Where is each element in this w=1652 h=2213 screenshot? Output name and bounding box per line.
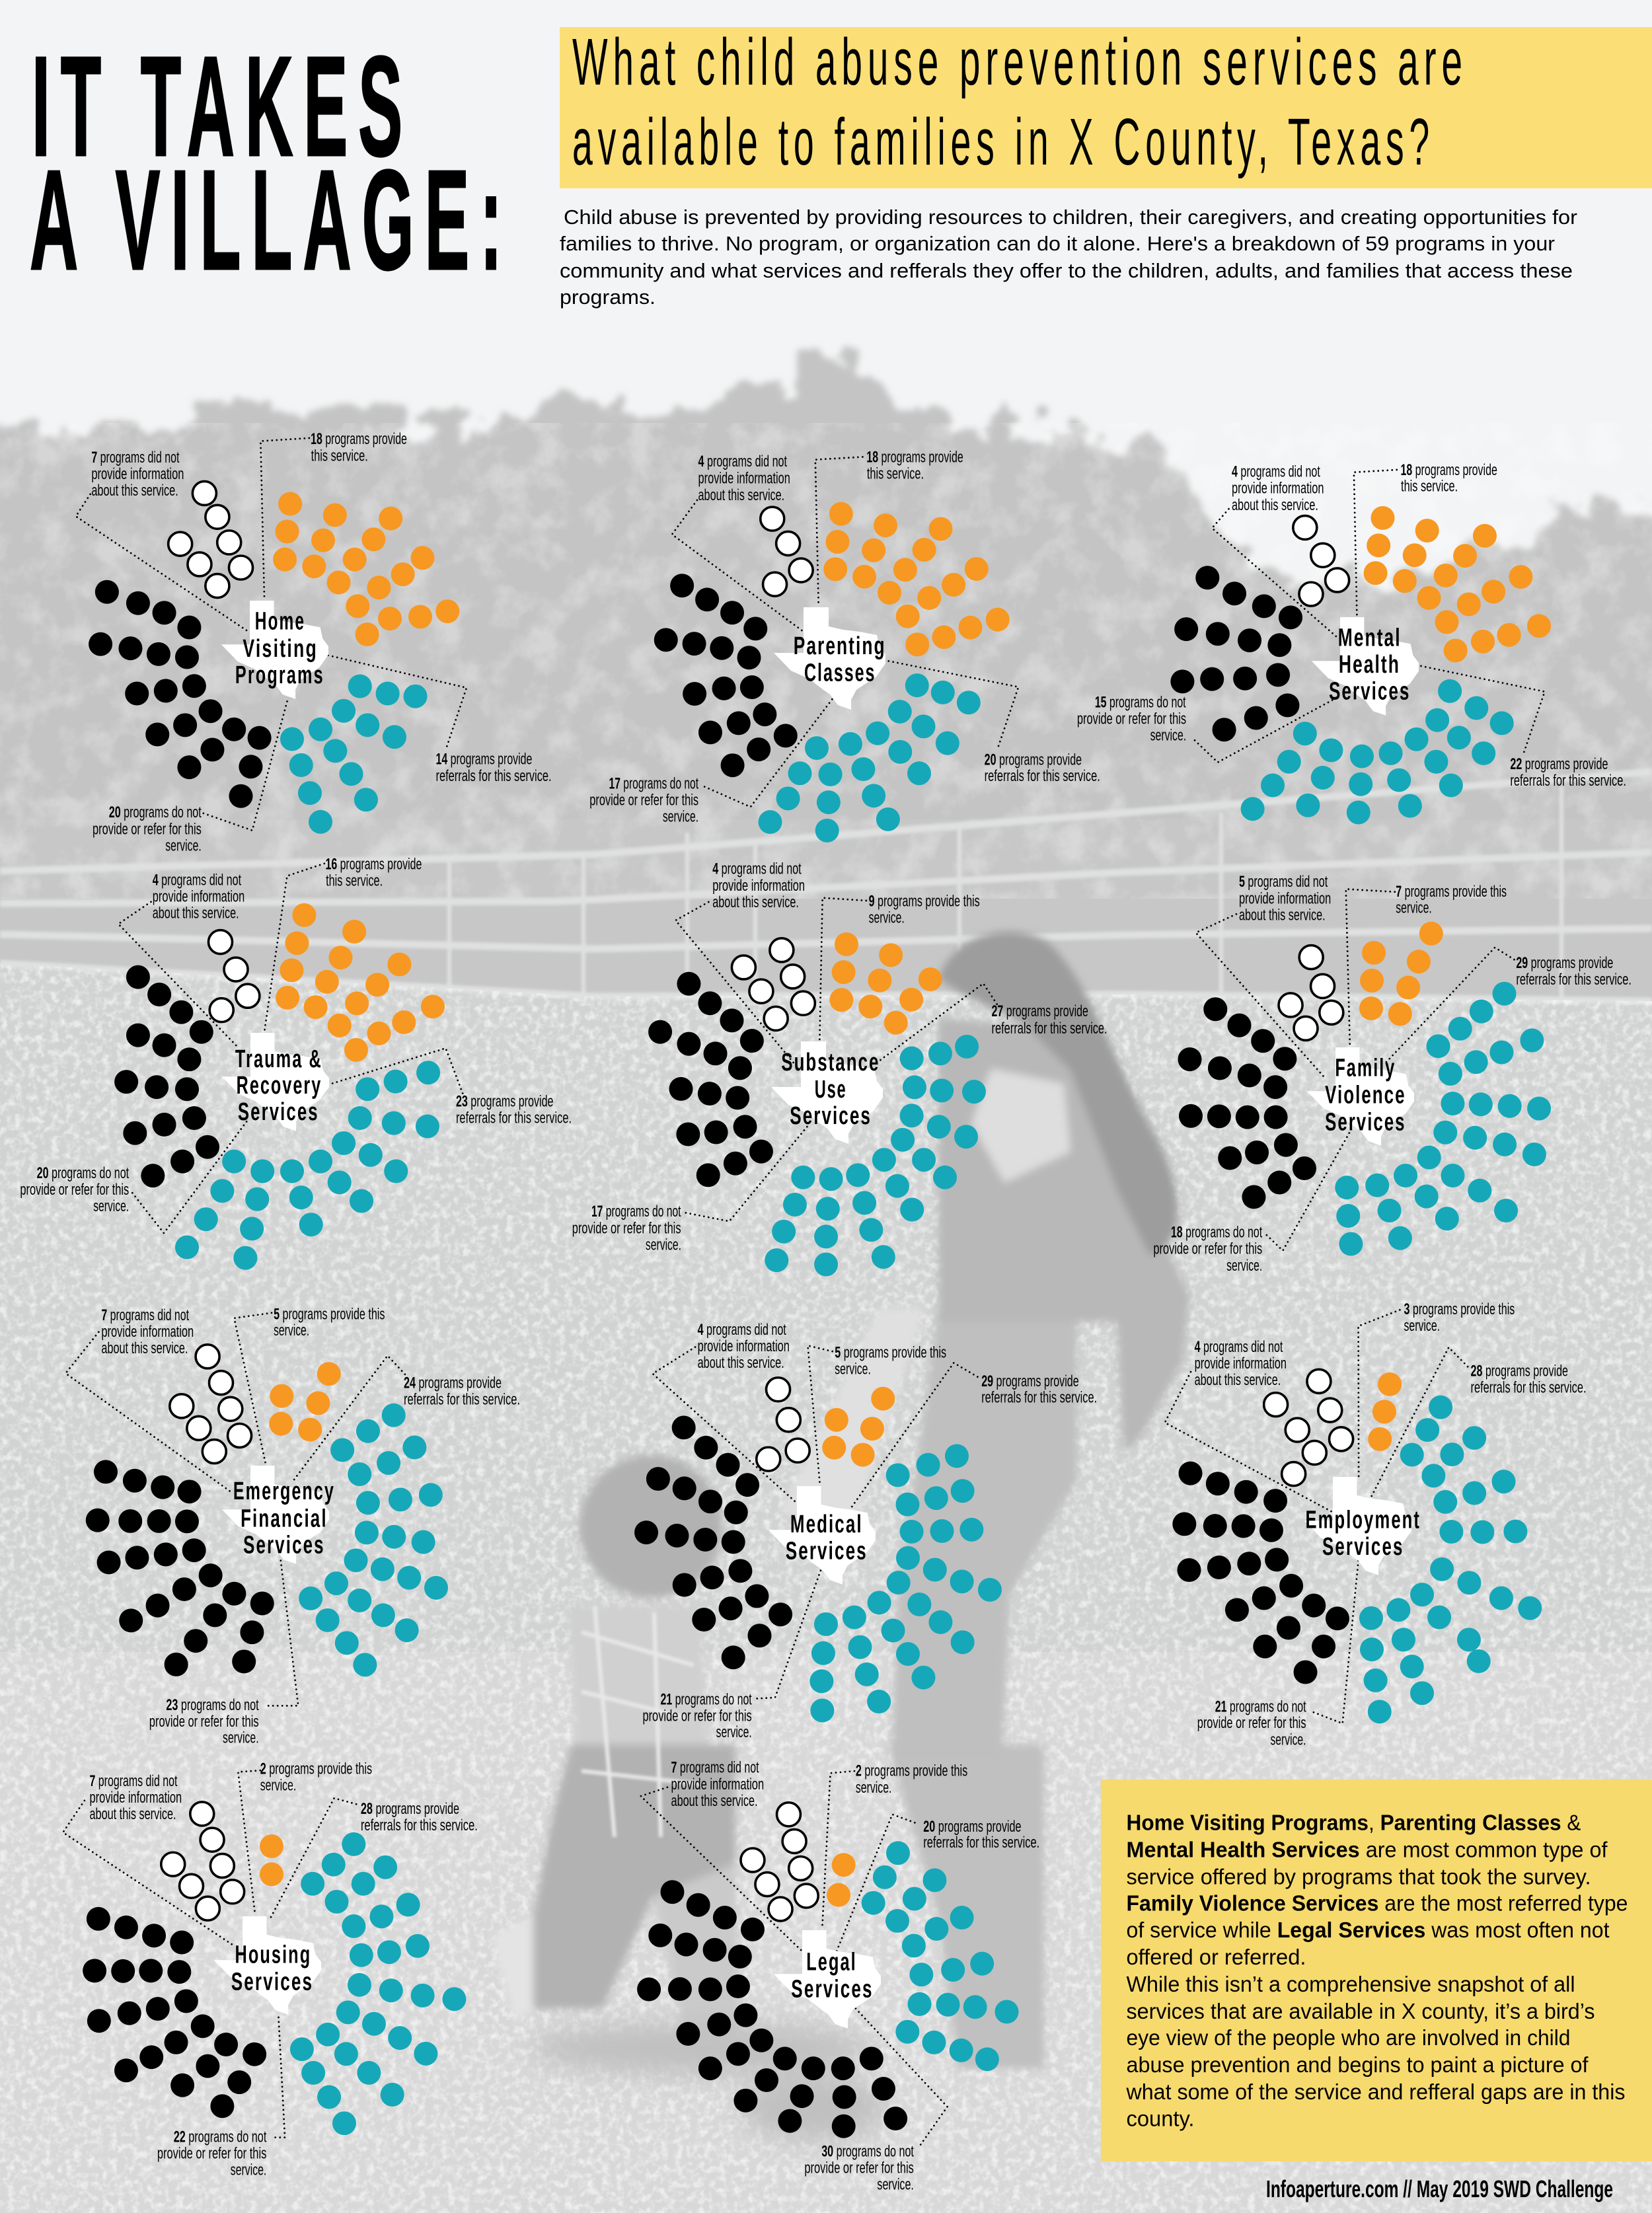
black dots: do not provide or refer: [634, 1415, 792, 1669]
teal dots: provide referrals: [175, 1061, 440, 1270]
callout: key takeaways: Mental Health Services are most common type of: [1126, 1837, 1608, 1862]
label: referrals: referrals for this service.: [436, 767, 552, 784]
label: referrals: referrals for this service.: [981, 1388, 1097, 1406]
service name: [1329, 623, 1410, 705]
label: no information: about this service.: [91, 481, 178, 499]
callout: key takeaways: what some of the service and refferal gaps are in this: [1126, 2080, 1626, 2104]
service name: Mental: [1338, 623, 1402, 652]
service name: Use: [815, 1075, 847, 1104]
service name: Employment: [1306, 1505, 1421, 1534]
teal dots: provide referrals: [765, 1035, 986, 1276]
service name: Visiting: [243, 634, 318, 663]
service name: Substance: [781, 1048, 880, 1076]
label: do not: provide or refer for this: [1153, 1240, 1262, 1257]
callout: key takeaways: services that are available in X county, it’s a bird’s: [1126, 1999, 1595, 2023]
teal dots: provide referrals: [280, 675, 428, 834]
service name: Violence: [1325, 1080, 1406, 1109]
panel: Legal Services: 30 programs do not: [821, 2142, 914, 2160]
label: do not: 23 programs do not: [166, 1697, 259, 1714]
black dots: do not provide or refer: [83, 1907, 266, 2118]
intro text block: programs.: [560, 285, 656, 309]
panel: Housing Services: 7 programs did not: [89, 1772, 177, 1789]
orange dots: provide service: [823, 502, 1010, 656]
label: do not: 20 programs do not: [109, 803, 202, 821]
label: provide: service.: [274, 1322, 309, 1339]
panel: Mental Health Services: provide information: [1232, 480, 1324, 497]
panel: Legal Services: Legal: [806, 1948, 857, 1976]
label: referrals: [361, 1799, 478, 1834]
panel: Home Visiting Programs: [76, 430, 552, 854]
panel: Housing Services: Services: [231, 1968, 313, 1996]
panel: Parenting Classes: [589, 448, 1100, 843]
service name: Emergency: [233, 1476, 335, 1505]
label: referrals: referrals for this service.: [456, 1109, 572, 1127]
label: provide: [1396, 882, 1507, 917]
label: provide: [856, 1762, 967, 1796]
text: referrals for this service.: [923, 1834, 1039, 1852]
white dots: no information: [161, 1802, 244, 1920]
panel: Family Violence Services: [1153, 872, 1632, 1274]
label: no information: 5 programs did not: [1239, 872, 1328, 890]
label: do not: provide or refer for this: [149, 1713, 259, 1731]
intro text block: [560, 206, 1577, 309]
label: do not: 21 programs do not: [1215, 1698, 1306, 1715]
label: referrals: [436, 749, 552, 784]
label: no information: about this service.: [1239, 906, 1326, 924]
orange dots: provide service: [829, 932, 942, 1035]
label: do not: provide or refer for this: [589, 791, 698, 809]
teal dots: provide referrals: [862, 1841, 1018, 2071]
label: provide: [311, 430, 407, 465]
label: no information: 7 programs did not: [101, 1306, 189, 1324]
label: provide: service.: [835, 1359, 871, 1378]
label: do not: [149, 1697, 259, 1746]
teal dots: provide referrals: [299, 1404, 448, 1676]
panel: Substance Use Services: [572, 860, 1108, 1276]
label: provide: this service.: [1401, 478, 1458, 495]
label: do not: [1197, 1698, 1306, 1748]
label: do not: service.: [93, 1197, 129, 1215]
panel: Legal Services: Services: [791, 1975, 874, 2003]
panel: Mental Health Services: provide or refer for this: [1077, 710, 1186, 728]
label: provide: service.: [260, 1776, 296, 1794]
label: provide: 18 programs provide: [311, 430, 407, 447]
label: do not: service.: [223, 1729, 259, 1746]
black dots: do not provide or refer: [654, 574, 798, 777]
service name: [794, 632, 886, 687]
label: no information: about this service.: [698, 1353, 784, 1371]
orange dots: provide service: [1368, 1372, 1402, 1451]
service name: Services: [1325, 1107, 1406, 1135]
label: do not: provide or refer for this: [93, 820, 202, 838]
label: do not: [804, 2142, 914, 2193]
label: do not: [20, 1164, 129, 1215]
panel: Employment Services: [1165, 1301, 1587, 1748]
black dots: do not provide or refer: [1172, 1462, 1349, 1684]
panel: Emergency Financial Services: [65, 1306, 520, 1746]
label: do not: 20 programs do not: [37, 1164, 129, 1182]
label: no information: about this service.: [698, 486, 784, 504]
panel: Housing Services: [63, 1760, 478, 2179]
label: no information: provide information: [712, 877, 805, 894]
callout: key takeaways: of service while Legal Services was most often not: [1126, 1918, 1610, 1942]
panel: Legal Services: service.: [877, 2175, 914, 2193]
panel: Housing Services: about this service.: [89, 1805, 176, 1822]
label: no information: about this service.: [712, 893, 799, 911]
label: provide: [869, 892, 980, 926]
label: referrals: 27 programs provide: [992, 1002, 1088, 1020]
callout: key takeaways: offered or referred.: [1126, 1945, 1306, 1969]
callout: key takeaways: While this isn’t a comprehensive snapshot of all: [1126, 1972, 1575, 1996]
label: referrals: [981, 1372, 1097, 1406]
panel: Housing Services: provide information: [89, 1788, 182, 1806]
label: do not: provide or refer for this: [1197, 1714, 1306, 1731]
callout: key takeaways: [1101, 1780, 1652, 2161]
label: do not: [589, 774, 698, 825]
label: referrals: 14 programs provide: [436, 749, 532, 768]
service name: Parenting: [794, 632, 886, 659]
label: no information: [1232, 463, 1324, 514]
title: It Takes a Village: IT TAKES: [32, 26, 413, 186]
label: provide: 9 programs provide this: [869, 892, 980, 910]
label: no information: [698, 452, 790, 504]
label: do not: provide or refer for this: [20, 1180, 129, 1198]
orange dots: provide service: [1359, 922, 1443, 1026]
label: provide: 3 programs provide this: [1404, 1301, 1515, 1318]
label: referrals: referrals for this service.: [985, 767, 1100, 784]
white dots: no information: [1293, 515, 1349, 606]
text: 20 programs provide: [923, 1818, 1022, 1836]
orange dots: provide service: [827, 1853, 856, 1907]
label: referrals: [404, 1374, 520, 1408]
panel: Housing Services: Housing: [235, 1941, 311, 1969]
label: no information: about this service.: [1232, 496, 1318, 514]
panel: Housing Services: 22 programs do not: [174, 2128, 266, 2146]
service name: [781, 1048, 880, 1130]
label: referrals: [1471, 1363, 1587, 1396]
label: do not: service.: [1226, 1256, 1262, 1274]
label: no information: provide information: [1239, 889, 1331, 907]
label: do not: 17 programs do not: [609, 774, 698, 792]
label: no information: provide information: [698, 1337, 790, 1355]
service name: Health: [1339, 650, 1400, 678]
orange dots: provide service: [260, 1834, 283, 1886]
service name: Medical: [790, 1509, 863, 1538]
white dots: no information: [1279, 946, 1343, 1040]
service name: Financial: [241, 1504, 328, 1532]
text: 28 programs provide: [361, 1799, 459, 1817]
teal dots: provide referrals: [290, 1832, 466, 2135]
label: provide: [866, 448, 963, 482]
label: provide: [1400, 461, 1497, 495]
panel: Legal Services: about this service.: [671, 1791, 758, 1809]
teal dots: provide referrals: [1359, 1396, 1542, 1723]
callout: key takeaways: county.: [1126, 2107, 1195, 2130]
teal dots: provide referrals: [759, 673, 981, 843]
label: provide: [260, 1760, 372, 1794]
service name: Classes: [804, 659, 876, 687]
label: no information: [671, 1758, 764, 1809]
label: referrals: [1510, 755, 1626, 790]
label: no information: [89, 1772, 182, 1822]
label: referrals: 24 programs provide: [404, 1374, 502, 1392]
service name: Trauma &: [235, 1045, 322, 1072]
label: referrals: referrals for this service.: [404, 1391, 520, 1408]
label: no information: provide information: [153, 887, 244, 905]
label: provide: this service.: [311, 446, 368, 465]
service name: [786, 1509, 868, 1565]
service name: Services: [790, 1102, 872, 1130]
label: provide: 5 programs provide this: [835, 1343, 946, 1361]
service name: [1325, 1053, 1406, 1135]
label: no information: [698, 1320, 790, 1371]
black dots: do not provide or refer: [648, 972, 773, 1187]
service name: [233, 1476, 335, 1559]
service name: Family: [1335, 1053, 1396, 1081]
label: do not: [1153, 1223, 1263, 1274]
service name: Programs: [235, 661, 324, 689]
label: no information: 4 programs did not: [712, 860, 802, 878]
panel: Housing Services: 2 programs provide this: [260, 1760, 372, 1778]
label: no information: provide information: [1195, 1355, 1287, 1372]
panel: Housing Services: service.: [231, 2161, 266, 2179]
label: provide: 16 programs provide: [325, 855, 422, 873]
black dots: do not provide or refer: [86, 1460, 274, 1676]
label: referrals: 28 programs provide: [1471, 1363, 1568, 1380]
panel: Medical Services: [634, 1320, 1097, 1741]
service name: Services: [243, 1530, 325, 1559]
label: no information: [1239, 872, 1331, 924]
service name: [235, 607, 324, 689]
label: provide: service.: [1396, 899, 1432, 917]
label: provide: [274, 1306, 385, 1339]
label: no information: [1195, 1339, 1287, 1389]
label: do not: [157, 2128, 266, 2179]
text: referrals for this service.: [361, 1816, 478, 1834]
label: provide: [325, 855, 422, 889]
intro text block: community and what services and refferals they offer to the children, adults, and families that access these: [560, 259, 1573, 282]
orange dots: provide service: [276, 903, 445, 1062]
label: do not: 17 programs do not: [591, 1202, 681, 1220]
service name: Services: [1322, 1532, 1404, 1560]
label: do not: [93, 803, 202, 854]
label: do not: 21 programs do not: [660, 1690, 752, 1708]
service name: Home: [255, 607, 305, 636]
black dots: do not provide or refer: [637, 1880, 907, 2138]
label: referrals: [985, 751, 1100, 784]
panel: Mental Health Services: Services: [1329, 677, 1410, 705]
label: no information: 7 programs did not: [91, 448, 180, 466]
white dots: no information: [208, 930, 260, 1022]
white dots: no information: [757, 1378, 809, 1471]
label: do not: service.: [716, 1723, 752, 1741]
white dots: no information: [169, 481, 253, 598]
callout: key takeaways: service offered by programs that took the survey.: [1126, 1865, 1591, 1889]
label: referrals: [923, 1818, 1039, 1852]
label: no information: 4 programs did not: [698, 1320, 786, 1338]
label: referrals: 23 programs provide: [456, 1092, 553, 1110]
white dots: no information: [1264, 1369, 1353, 1486]
intro text block: Child abuse is prevented by providing resources to children, their caregivers, and creating opportunities for: [564, 206, 1577, 229]
label: do not: [572, 1202, 681, 1254]
service name: Services: [238, 1098, 319, 1126]
intro text block: families to thrive. No program, or organization can do it alone. Here's a breakdown of 59 programs in your: [560, 232, 1555, 255]
label: provide: 5 programs provide this: [274, 1306, 385, 1323]
heading banner: question: [560, 25, 1652, 188]
orange dots: provide service: [273, 492, 459, 646]
panel: Mental Health Services: service.: [1150, 727, 1186, 744]
black dots: do not provide or refer: [89, 580, 272, 808]
white dots: no information: [741, 1803, 818, 1921]
label: provide: this service.: [867, 465, 924, 482]
label: no information: 4 programs did not: [153, 871, 241, 889]
label: no information: 4 programs did not: [1232, 463, 1320, 480]
orange dots: provide service: [1364, 506, 1551, 662]
label: no information: provide information: [698, 469, 790, 487]
label: no information: provide information: [101, 1323, 194, 1341]
label: referrals: 29 programs provide: [981, 1372, 1079, 1390]
callout: key takeaways: abuse prevention and begins to paint a picture of: [1126, 2052, 1589, 2077]
label: referrals: [992, 1002, 1108, 1037]
teal dots: provide referrals: [1241, 679, 1514, 824]
label: no information: [153, 871, 244, 922]
label: provide: this service.: [326, 872, 383, 889]
black dots: do not provide or refer: [114, 965, 219, 1187]
label: do not: 18 programs do not: [1171, 1223, 1263, 1241]
orange dots: provide service: [822, 1387, 895, 1467]
label: provide: service.: [856, 1778, 891, 1796]
label: do not: [1077, 694, 1186, 744]
label: no information: 4 programs did not: [698, 452, 787, 470]
label: do not: service.: [165, 836, 202, 854]
white dots: no information: [732, 938, 815, 1030]
label: do not: provide or refer for this: [642, 1707, 752, 1725]
service name: [1306, 1505, 1421, 1560]
label: do not: 15 programs do not: [1095, 694, 1186, 711]
label: do not: provide or refer for this: [572, 1219, 681, 1237]
orange dots: provide service: [269, 1362, 341, 1442]
label: provide: 18 programs provide: [1400, 461, 1497, 479]
label: provide: 18 programs provide: [866, 448, 963, 466]
label: do not: service.: [646, 1236, 681, 1254]
label: provide: service.: [1404, 1318, 1440, 1335]
label: no information: [91, 448, 184, 499]
callout: key takeaways: eye view of the people who are involved in child: [1126, 2025, 1570, 2050]
service name: [791, 1948, 874, 2003]
label: provide: [835, 1343, 946, 1378]
service name: Services: [786, 1536, 868, 1565]
label: do not: service.: [1270, 1731, 1306, 1748]
text: A VILLAGE:: [30, 140, 513, 299]
label: no information: 4 programs did not: [1195, 1339, 1283, 1356]
white dots: no information: [761, 507, 813, 596]
black dots: do not provide or refer: [1178, 997, 1316, 1209]
panel: Trauma & Recovery Services: [20, 855, 572, 1270]
label: do not: service.: [663, 807, 698, 825]
label: do not: [642, 1690, 752, 1741]
teal dots: provide referrals: [1335, 982, 1551, 1256]
white dots: no information: [170, 1345, 252, 1464]
label: referrals: [456, 1092, 572, 1127]
service name: [231, 1941, 313, 1996]
label: provide: service.: [869, 909, 905, 926]
panel: Legal Services: provide or refer for this: [804, 2159, 914, 2177]
panel: Housing Services: provide or refer for this: [157, 2144, 266, 2162]
label: no information: [712, 860, 805, 911]
service name: Recovery: [237, 1071, 322, 1100]
teal dots: provide referrals: [809, 1444, 1002, 1722]
label: referrals: referrals for this service.: [992, 1019, 1108, 1037]
callout: key takeaways: Family Violence Services are the most referred type: [1126, 1891, 1628, 1916]
panel: Legal Services: 2 programs provide this: [856, 1762, 967, 1780]
panel: Legal Services: 7 programs did not: [671, 1758, 759, 1776]
service name: [235, 1045, 322, 1126]
label: no information: about this service.: [1195, 1372, 1281, 1389]
black dots: do not provide or refer: [1170, 566, 1302, 741]
panel: Legal Services: provide information: [671, 1775, 764, 1793]
label: no information: about this service.: [153, 904, 239, 922]
callout: key takeaways: Home Visiting Programs, Parenting Classes &: [1126, 1811, 1581, 1834]
label: provide: 7 programs provide this: [1396, 882, 1507, 900]
label: referrals: 20 programs provide: [985, 751, 1082, 769]
label: no information: [101, 1306, 194, 1357]
panel: Mental Health Services: [1077, 461, 1626, 824]
label: referrals: [1516, 954, 1632, 989]
label: no information: provide information: [91, 465, 184, 482]
label: no information: about this service.: [101, 1339, 188, 1357]
title: It Takes a Village: [30, 26, 513, 299]
panel: Legal Services: [637, 1758, 1039, 2193]
label: provide: [1404, 1301, 1515, 1335]
